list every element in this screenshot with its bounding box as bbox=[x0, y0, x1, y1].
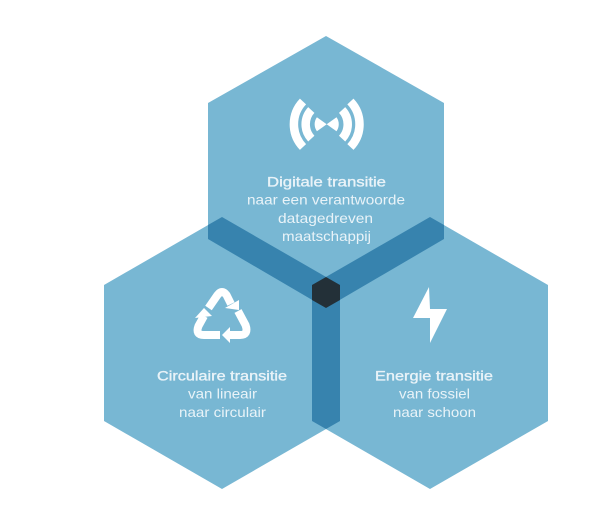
text: digital transition: naar een verantwoorde bbox=[247, 192, 405, 208]
text: circular transition: naar circulair bbox=[179, 404, 266, 420]
text: digital transition bbox=[247, 174, 405, 244]
text: circular transition: van lineair bbox=[188, 386, 257, 402]
overlap: digital and circular bbox=[208, 217, 340, 308]
hexagon: energy transition bbox=[312, 217, 548, 489]
text: digital transition: maatschappij bbox=[282, 228, 371, 244]
icon: lightning bolt bbox=[413, 287, 447, 343]
text: energy transition: Energie transitie bbox=[375, 368, 493, 384]
hexagon: circular transition bbox=[104, 217, 340, 489]
text: energy transition: naar schoon bbox=[393, 404, 476, 420]
hexagon: digital transition bbox=[208, 36, 444, 308]
text: circular transition bbox=[157, 368, 287, 420]
overlap: digital and energy bbox=[312, 217, 444, 308]
text: digital transition: datagedreven bbox=[278, 210, 373, 226]
centre hexagon bbox=[312, 277, 340, 308]
text: digital transition: Digitale transitie bbox=[267, 174, 386, 190]
text: energy transition: van fossiel bbox=[399, 386, 470, 402]
text: energy transition bbox=[375, 368, 493, 420]
text: circular transition: Circulaire transitie bbox=[157, 368, 287, 384]
icon: recycling arrows bbox=[195, 292, 246, 343]
icon: wireless signal bbox=[294, 102, 359, 147]
overlap: circular and energy bbox=[312, 277, 340, 429]
